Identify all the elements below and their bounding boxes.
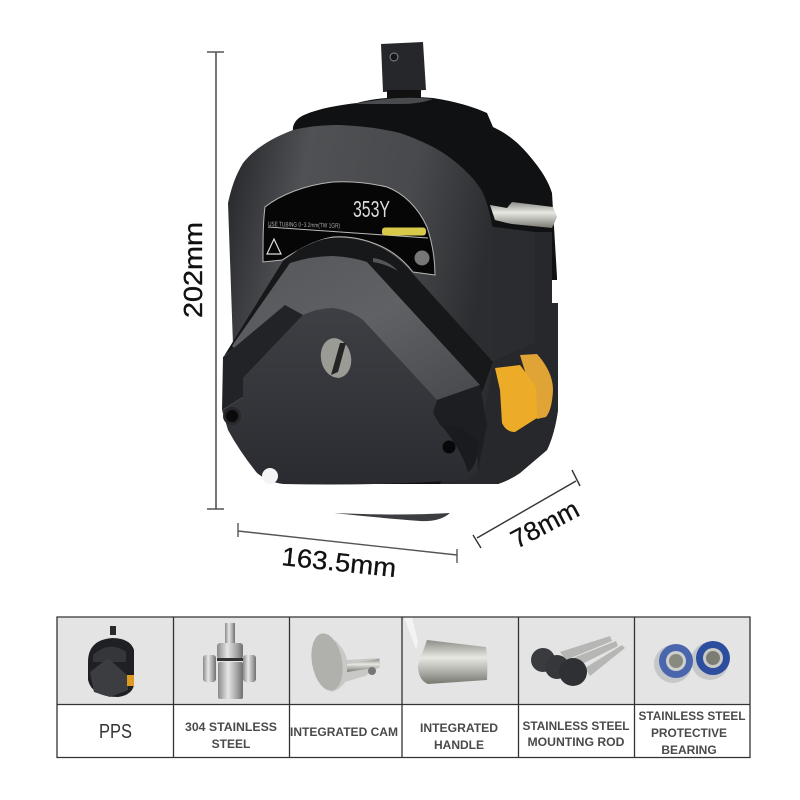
crescent on arch xyxy=(373,258,398,271)
label: mounting rod: STAINLESS STEEL xyxy=(522,719,630,733)
cover left chamfer xyxy=(222,305,303,410)
part image: cam xyxy=(307,631,380,693)
table grid xyxy=(57,617,750,758)
dimension: height 202mm xyxy=(178,52,224,509)
model number: 353Y xyxy=(353,196,390,222)
label: integrated handle: HANDLE xyxy=(434,738,484,752)
dimension: depth 78mm: 78mm xyxy=(506,494,584,554)
dimension: width 163.5mm: 163.5mm xyxy=(280,541,398,583)
cover right chamfer xyxy=(433,385,487,470)
label: protective bearing: STAINLESS STEEL xyxy=(638,709,746,723)
label: 304 stainless steel: 304 STAINLESS xyxy=(185,720,277,734)
pump illustration xyxy=(222,42,558,521)
parts table xyxy=(57,617,750,758)
part image: bearings xyxy=(654,641,730,683)
icon: steel pin xyxy=(490,202,557,228)
cover dark band xyxy=(224,238,493,392)
cover front face xyxy=(222,308,478,484)
housing side panel xyxy=(487,226,535,362)
label: integrated cam: INTEGRATED CAM xyxy=(290,725,398,739)
ground shadow xyxy=(334,513,450,521)
label: 304 stainless steel: STEEL xyxy=(212,737,250,751)
icon: right screw hole xyxy=(441,425,478,472)
label: integrated handle: INTEGRATED xyxy=(420,721,498,735)
label: mounting rod: MOUNTING ROD xyxy=(528,735,625,749)
front shell xyxy=(228,125,493,484)
dimension: width 163.5mm xyxy=(238,523,457,583)
white smudge xyxy=(262,468,278,484)
part image: handle xyxy=(404,617,487,684)
part image: PPS pump xyxy=(88,626,134,697)
icon: left screw hole xyxy=(223,407,241,425)
pump cover xyxy=(222,256,487,484)
icon: centre screw xyxy=(317,335,355,381)
dimension: height 202mm: 202mm xyxy=(178,222,208,318)
icon: warning triangle xyxy=(267,239,281,254)
icon: yellow latch xyxy=(495,354,553,432)
part image: 304 steel rotor xyxy=(203,623,256,699)
tubing note: USE TUBING 0~3.2mm(TW 1GR) xyxy=(268,221,340,230)
hood highlight xyxy=(355,98,433,104)
label: protective bearing xyxy=(638,709,746,757)
label: mounting rod xyxy=(522,719,630,749)
icon: top knob xyxy=(381,42,426,102)
label plate xyxy=(263,182,435,275)
dimension: depth 78mm xyxy=(473,470,584,554)
rear housing xyxy=(290,97,558,484)
image row backgrounds xyxy=(57,617,750,704)
label: PPS: PPS xyxy=(99,721,132,743)
yellow indicator xyxy=(382,228,426,236)
label: 304 stainless steel xyxy=(185,720,277,751)
label: integrated handle xyxy=(420,721,498,752)
icon: logo xyxy=(414,250,430,266)
label: protective bearing: PROTECTIVE xyxy=(651,726,727,740)
part image: mounting rod xyxy=(531,636,625,686)
cover upper sloped face xyxy=(232,256,480,400)
label: protective bearing: BEARING xyxy=(661,743,717,757)
